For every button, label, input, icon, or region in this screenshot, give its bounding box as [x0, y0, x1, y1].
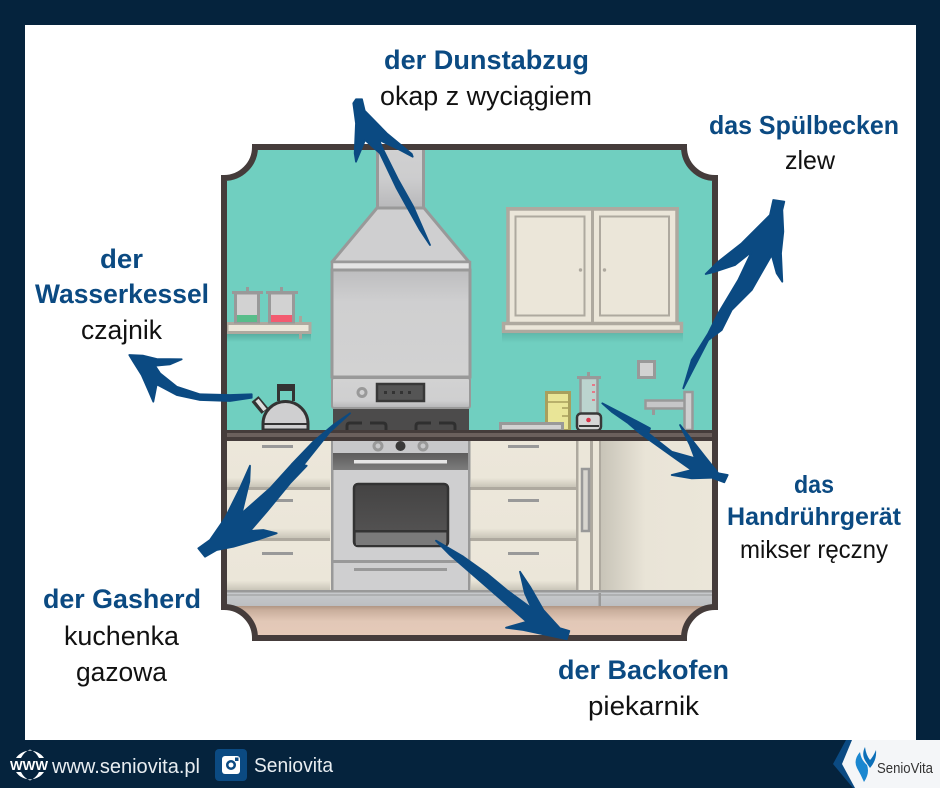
floor [236, 606, 703, 635]
arrow: der Wasserkessel [129, 355, 252, 402]
label: der Gasherd [43, 584, 201, 687]
frame [224, 147, 715, 638]
label: der Gasherd: der Gasherd [43, 584, 201, 614]
countertop [221, 430, 718, 441]
label: der Backofen: piekarnik [588, 691, 700, 721]
label: der Dunstabzug [380, 45, 592, 111]
footer [10, 740, 940, 788]
label: der Wasserkessel [35, 244, 209, 345]
label: das Spülbecken [709, 110, 899, 175]
toaster blender and mixer items [500, 372, 601, 430]
label: der Backofen: der Backofen [558, 655, 729, 685]
label: der Wasserkessel: czajnik [81, 315, 162, 345]
icon: www globe: WWW [10, 758, 49, 773]
logo: SenioVita: SenioVita [877, 760, 934, 777]
arrow: der Dunstabzug [353, 99, 430, 245]
icon: instagram [215, 749, 247, 781]
baseboard [221, 590, 718, 606]
logo: SenioVita [833, 740, 940, 788]
label: der Gasherd: gazowa [76, 657, 168, 687]
arrow: der Backofen [436, 541, 569, 639]
label: der Wasserkessel: der [100, 244, 143, 274]
wall shelf with jars [227, 287, 311, 342]
kitchen illustration [221, 144, 718, 640]
label: das Handrührgerät: mikser ręczny [740, 536, 888, 564]
label: das Handrührgerät: Handrührgerät [727, 503, 902, 531]
stove control panel [332, 378, 470, 408]
stove top with burners [333, 409, 469, 431]
label: der Wasserkessel: Wasserkessel [35, 279, 209, 309]
arrow: das Handrührgerät [602, 403, 728, 482]
arrow: das Spülbecken [683, 200, 784, 388]
wall cabinet [502, 207, 683, 343]
label: das Spülbecken: zlew [785, 145, 835, 175]
label: das Handrührgerät [727, 471, 902, 564]
instagram handle: Seniovita [254, 755, 334, 777]
label: das Handrührgerät: das [794, 471, 834, 499]
label: das Spülbecken: das Spülbecken [709, 110, 899, 140]
teal wall [221, 144, 718, 434]
faucet [646, 392, 692, 430]
arrow: der Gasherd [198, 413, 350, 557]
label: der Dunstabzug: der Dunstabzug [384, 45, 589, 75]
lower cabinets [221, 440, 718, 592]
label: der Dunstabzug: okap z wyciągiem [380, 81, 592, 111]
label: der Backofen [558, 655, 729, 721]
website url: www.seniovita.pl [51, 756, 200, 778]
wall switch [638, 362, 654, 378]
label: der Gasherd: kuchenka [64, 621, 180, 651]
kettle [255, 384, 308, 430]
range hood [332, 148, 470, 377]
icon: www globe [10, 750, 49, 780]
oven [331, 441, 470, 591]
